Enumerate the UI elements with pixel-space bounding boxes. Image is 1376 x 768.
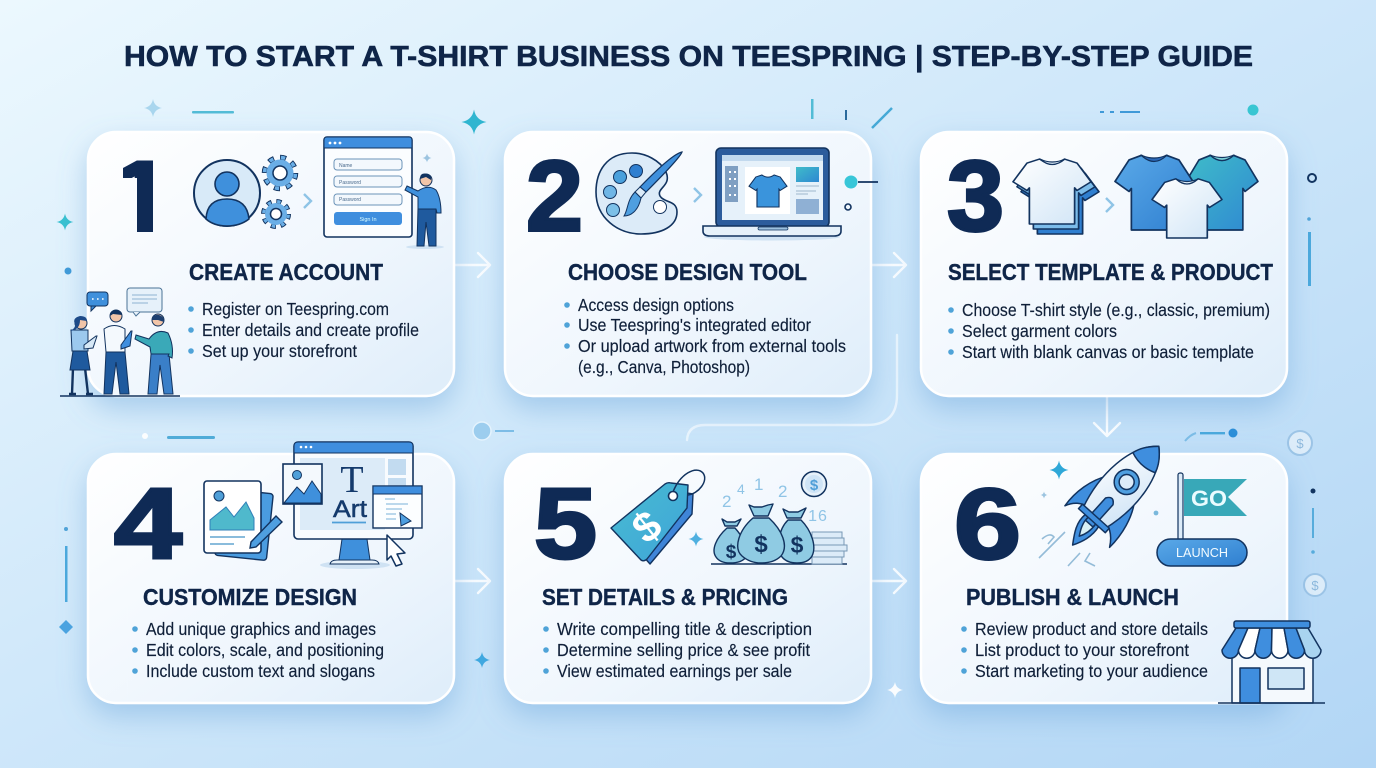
bullet list xyxy=(543,619,812,681)
bullet list: Start with blank canvas or basic template xyxy=(962,342,1254,362)
icon: floating numbers and coin: 1 xyxy=(754,475,763,494)
card background xyxy=(505,454,871,703)
bullet list: Start marketing to your audience xyxy=(975,661,1208,681)
icon: money bags and coins: $ xyxy=(754,531,768,558)
icon: sign-in window: Password xyxy=(339,180,361,186)
title: HOW TO START A T-SHIRT BUSINESS ON TEESPRING | STEP-BY-STEP GUIDE xyxy=(124,41,1253,73)
bullet list xyxy=(188,299,419,361)
heading: CHOOSE DESIGN TOOL xyxy=(568,259,807,285)
icon: image document and pencil xyxy=(204,481,282,561)
bullet list xyxy=(948,300,1270,362)
bullet list: View estimated earnings per sale xyxy=(557,661,792,681)
panel: step 6 publish and launch xyxy=(921,426,1325,703)
icon: sparkle xyxy=(688,532,704,546)
card background xyxy=(88,454,454,703)
icon: launch button: LAUNCH xyxy=(1176,546,1228,560)
bullet list: Include custom text and slogans xyxy=(146,661,375,681)
icon: rocket xyxy=(1048,426,1182,565)
icon: floating numbers and coin: 16 xyxy=(808,508,828,525)
bullet list: Determine selling price & see profit xyxy=(557,640,810,660)
icon: go flag xyxy=(1178,473,1247,541)
decorative sparkles, dots and lines xyxy=(56,99,1326,698)
decorative node: teal dot with dash and ring xyxy=(844,176,878,210)
bullet list xyxy=(961,619,1208,681)
icon: paint palette and brush xyxy=(596,152,682,234)
icon: floating numbers and coin: 2 xyxy=(778,482,787,501)
icon: sign-in window: Sign In xyxy=(359,217,377,223)
bullet list: Edit colors, scale, and positioning xyxy=(146,640,384,660)
icon: monitor with art editor: Art xyxy=(333,496,367,523)
bullet list xyxy=(132,619,384,681)
icon: chevron xyxy=(304,194,311,208)
icon: monitor with art editor xyxy=(283,442,422,569)
icon: floating numbers and coin xyxy=(722,472,828,525)
icon: sign-in window: Name xyxy=(339,163,353,169)
icon: go flag: GO xyxy=(1191,486,1227,511)
heading: SELECT TEMPLATE & PRODUCT xyxy=(948,259,1273,285)
card background xyxy=(921,454,1287,703)
panel: step 5 set details and pricing xyxy=(505,454,871,703)
bullet list: Or upload artwork from external tools xyxy=(578,336,846,356)
step number 5: 5 xyxy=(534,468,597,580)
icon: sign-in window: Password xyxy=(339,197,361,203)
step number 3: 3 xyxy=(947,140,1004,252)
bullet list: Enter details and create profile xyxy=(202,320,419,340)
icon: money bags and coins: $ xyxy=(791,532,804,558)
bullet list: Use Teespring's integrated editor xyxy=(578,315,811,335)
bullet list xyxy=(564,295,846,377)
icon: floating numbers and coin: 4 xyxy=(737,481,745,497)
icon: man pointing xyxy=(405,154,444,249)
panel: step 3 select template and product xyxy=(921,132,1287,396)
bullet list: Choose T-shirt style (e.g., classic, premium) xyxy=(962,300,1270,320)
icon: gears xyxy=(264,158,296,226)
decorative sparkles, dots and lines: $ xyxy=(1296,436,1304,451)
bullet list: Access design options xyxy=(578,295,734,315)
step number 1: 1 xyxy=(108,141,175,253)
icon: floating numbers and coin: $ xyxy=(810,477,819,494)
bullet list: Set up your storefront xyxy=(202,341,357,361)
icon: money bags and coins: $ xyxy=(726,542,737,563)
bullet list: (e.g., Canva, Photoshop) xyxy=(578,357,750,377)
bullet list: Register on Teespring.com xyxy=(202,299,389,319)
icon: sign-in window xyxy=(324,137,412,237)
icon: price tag: $ xyxy=(623,501,670,552)
arrow: connector from step 3 back to step 4 row xyxy=(687,335,897,440)
icon: coloured t-shirts xyxy=(1115,155,1258,238)
icon: monitor with art editor: T xyxy=(340,459,364,501)
icon: sparkles xyxy=(1040,460,1158,515)
arrow: step 5 to 6 xyxy=(871,569,906,593)
icon: stack of white t-shirts xyxy=(1013,159,1099,234)
step number 6: 6 xyxy=(954,468,1021,580)
heading: CUSTOMIZE DESIGN xyxy=(143,584,357,610)
icon: price tag xyxy=(611,470,705,564)
card background xyxy=(921,132,1287,396)
icon: chevron xyxy=(694,188,701,202)
panel: step 4 customize design xyxy=(88,442,454,703)
icon: money bags and coins xyxy=(711,504,847,564)
icon: chevron xyxy=(1106,198,1113,212)
heading: PUBLISH & LAUNCH xyxy=(966,584,1179,610)
panel: step 1 create account xyxy=(60,132,454,396)
arrow: step 2 to 3 xyxy=(871,253,906,277)
heading: CREATE ACCOUNT xyxy=(189,259,383,285)
bullet list: Select garment colors xyxy=(962,321,1117,341)
card background xyxy=(505,132,871,396)
icon: laptop with t-shirt editor xyxy=(703,148,841,240)
arrow: step 4 to 5 xyxy=(455,569,490,593)
step number 2: 2 xyxy=(526,140,583,252)
card background xyxy=(88,132,454,396)
decorative sparkles, dots and lines: $ xyxy=(1311,578,1319,593)
bullet list: Write compelling title & description xyxy=(557,619,812,639)
bullet list: Review product and store details xyxy=(975,619,1208,639)
panel: step 2 choose design tool xyxy=(505,132,878,396)
arrow: step 3 to 6 xyxy=(1094,396,1120,436)
bullet list: List product to your storefront xyxy=(975,640,1189,660)
icon: user avatar xyxy=(194,160,260,226)
bullet list: Add unique graphics and images xyxy=(146,619,376,639)
icon: floating numbers and coin: 2 xyxy=(722,492,731,511)
icon: storefront xyxy=(1218,621,1325,703)
heading: SET DETAILS & PRICING xyxy=(542,584,788,610)
arrow: step 1 to 2 xyxy=(455,253,490,277)
icon: speed lines xyxy=(1039,532,1095,566)
step number 4: 4 xyxy=(114,468,182,580)
icon: launch button xyxy=(1157,539,1247,566)
illustration: team discussing xyxy=(60,288,180,396)
